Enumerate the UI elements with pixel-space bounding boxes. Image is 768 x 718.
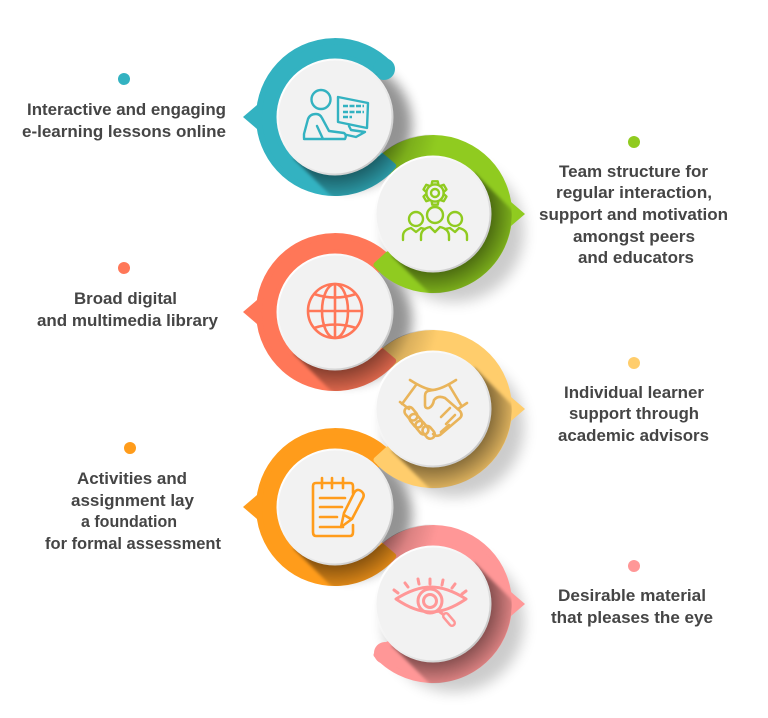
icon: notebook and pencil (313, 478, 364, 536)
icon: learner at computer (304, 90, 368, 139)
text: learner support: Individual learner (564, 384, 705, 402)
text: team structure: support and motivation (539, 206, 728, 224)
text: team structure: regular interaction, (556, 184, 712, 202)
text: interactive lessons: Interactive and engaging (27, 101, 226, 119)
icon: team with gear (403, 181, 467, 240)
text: digital library: and multimedia library (37, 312, 218, 330)
text: activities and assignment: Activities and (77, 470, 187, 488)
text: digital library (37, 290, 218, 330)
disc 6 (374, 546, 492, 662)
disc 3 (276, 254, 394, 370)
ring 4: yellow (374, 330, 525, 488)
dot: orange (124, 442, 136, 454)
dot: teal (118, 73, 130, 85)
text: team structure: Team structure for (559, 163, 709, 181)
text: team structure: amongst peers (573, 228, 695, 246)
soft shadows on the background (286, 62, 524, 692)
ring 2: green (374, 135, 525, 294)
text: digital library: Broad digital (74, 290, 177, 308)
ring 5: orange (243, 428, 432, 586)
text: learner support: support through (569, 405, 699, 423)
dot: green (628, 136, 640, 148)
disc 4 (374, 350, 492, 468)
icon: handshake (400, 380, 467, 441)
ring 6: pink (374, 525, 525, 684)
text: desirable material: Desirable material (558, 587, 706, 605)
text: desirable material (551, 587, 713, 627)
disc 2 (374, 156, 492, 272)
dot: yellow (628, 357, 640, 369)
text: learner support: academic advisors (558, 427, 709, 445)
text: interactive lessons: e-learning lessons online (22, 123, 226, 141)
text: activities and assignment: a foundation (81, 513, 177, 531)
disc 5 (276, 448, 394, 566)
text: team structure (539, 163, 728, 267)
text: team structure: and educators (578, 249, 694, 267)
ring 3: coral (243, 233, 432, 391)
dot: pink (628, 560, 640, 572)
icon: globe (308, 284, 362, 338)
dot: coral (118, 262, 130, 274)
disc 1 (276, 58, 394, 176)
text: desirable material: that pleases the eye (551, 609, 713, 627)
text: interactive lessons (22, 101, 226, 141)
text: activities and assignment (45, 470, 222, 553)
text: learner support (558, 384, 709, 445)
text: activities and assignment: assignment lay (71, 492, 194, 510)
ring 1: teal (243, 38, 432, 196)
text: activities and assignment: for formal assessment (45, 535, 222, 553)
icon: eye with magnifier (394, 579, 466, 623)
